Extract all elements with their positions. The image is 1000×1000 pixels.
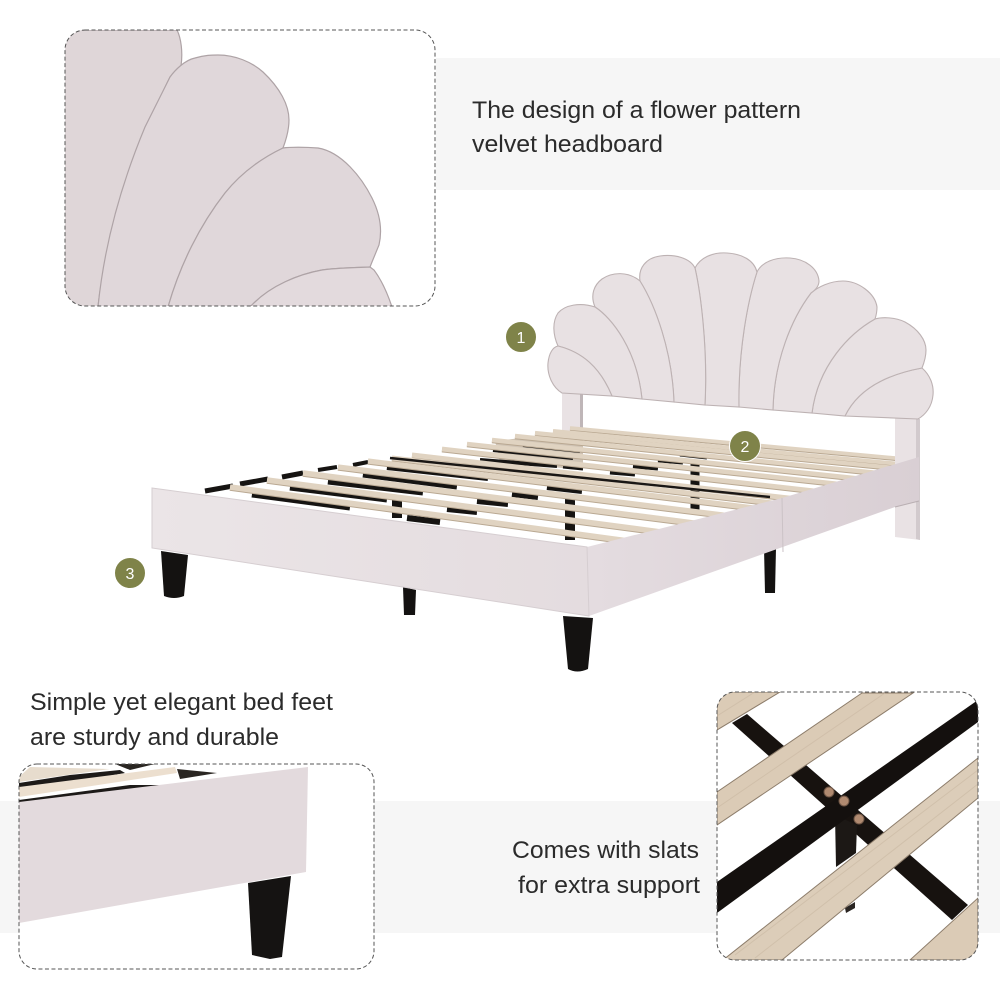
wooden slats <box>230 428 915 544</box>
foot leg <box>248 876 291 959</box>
petal A <box>60 30 182 307</box>
wood grain <box>717 692 978 958</box>
petal 9 right lower <box>845 368 933 419</box>
petal 5 center <box>695 253 757 407</box>
steel leg <box>835 822 857 867</box>
metal frame under slats <box>205 433 707 540</box>
text: slats: Comes with slats <box>512 837 699 864</box>
headboard left post <box>562 390 583 434</box>
wooden slat 2 <box>717 693 913 825</box>
front rail <box>152 488 589 616</box>
foot rail <box>19 767 308 923</box>
bolts <box>824 787 864 824</box>
panel: bed foot detail <box>19 764 374 969</box>
upper slat <box>19 767 110 782</box>
petal 4 <box>640 256 706 405</box>
front legs <box>161 551 593 672</box>
marker 3: 3 <box>126 566 135 583</box>
headboard right post <box>895 417 920 540</box>
top grey text band <box>436 58 1000 190</box>
petal B <box>98 55 289 307</box>
heading: flower pattern headboard: velvet headboard <box>472 131 663 158</box>
panel: headboard detail <box>60 30 435 307</box>
marker 2: 2 <box>741 439 750 456</box>
petal C <box>168 147 381 307</box>
dark frame behind slats <box>19 770 125 787</box>
wooden slat 3 <box>723 758 978 960</box>
marker 3 <box>114 558 146 588</box>
heading: flower pattern headboard: The design of a flower pattern <box>472 97 801 124</box>
petal D <box>250 267 392 307</box>
text: bed feet <box>30 689 333 751</box>
lower slat <box>19 767 177 797</box>
bed illustration <box>152 253 933 672</box>
side rail <box>587 457 919 616</box>
panel: slat detail <box>717 692 978 960</box>
text: bed feet: are sturdy and durable <box>30 724 279 751</box>
petal 1 left lower <box>548 346 612 396</box>
bottom grey text band <box>0 801 1000 933</box>
petal 8 <box>812 318 926 416</box>
rear legs <box>403 548 776 615</box>
petal 7 <box>773 281 877 413</box>
text: bed feet: Simple yet elegant bed feet <box>30 689 333 716</box>
shaded area under back slats <box>495 431 583 470</box>
petal 6 <box>739 258 819 410</box>
wooden slat 1 <box>717 692 780 730</box>
centre steel spine <box>390 458 770 497</box>
petal 2 <box>554 305 642 399</box>
marker 1: 1 <box>517 330 526 347</box>
steel cross bar <box>732 714 968 920</box>
heading: flower pattern headboard <box>472 97 801 158</box>
wooden slat 4 <box>910 898 978 960</box>
text: slats <box>512 837 700 899</box>
marker 2 <box>730 430 760 462</box>
petal 3 <box>593 274 674 402</box>
marker 1 <box>506 322 536 352</box>
headboard <box>548 253 933 419</box>
text: slats: for extra support <box>518 872 700 899</box>
steel spine <box>717 700 978 913</box>
